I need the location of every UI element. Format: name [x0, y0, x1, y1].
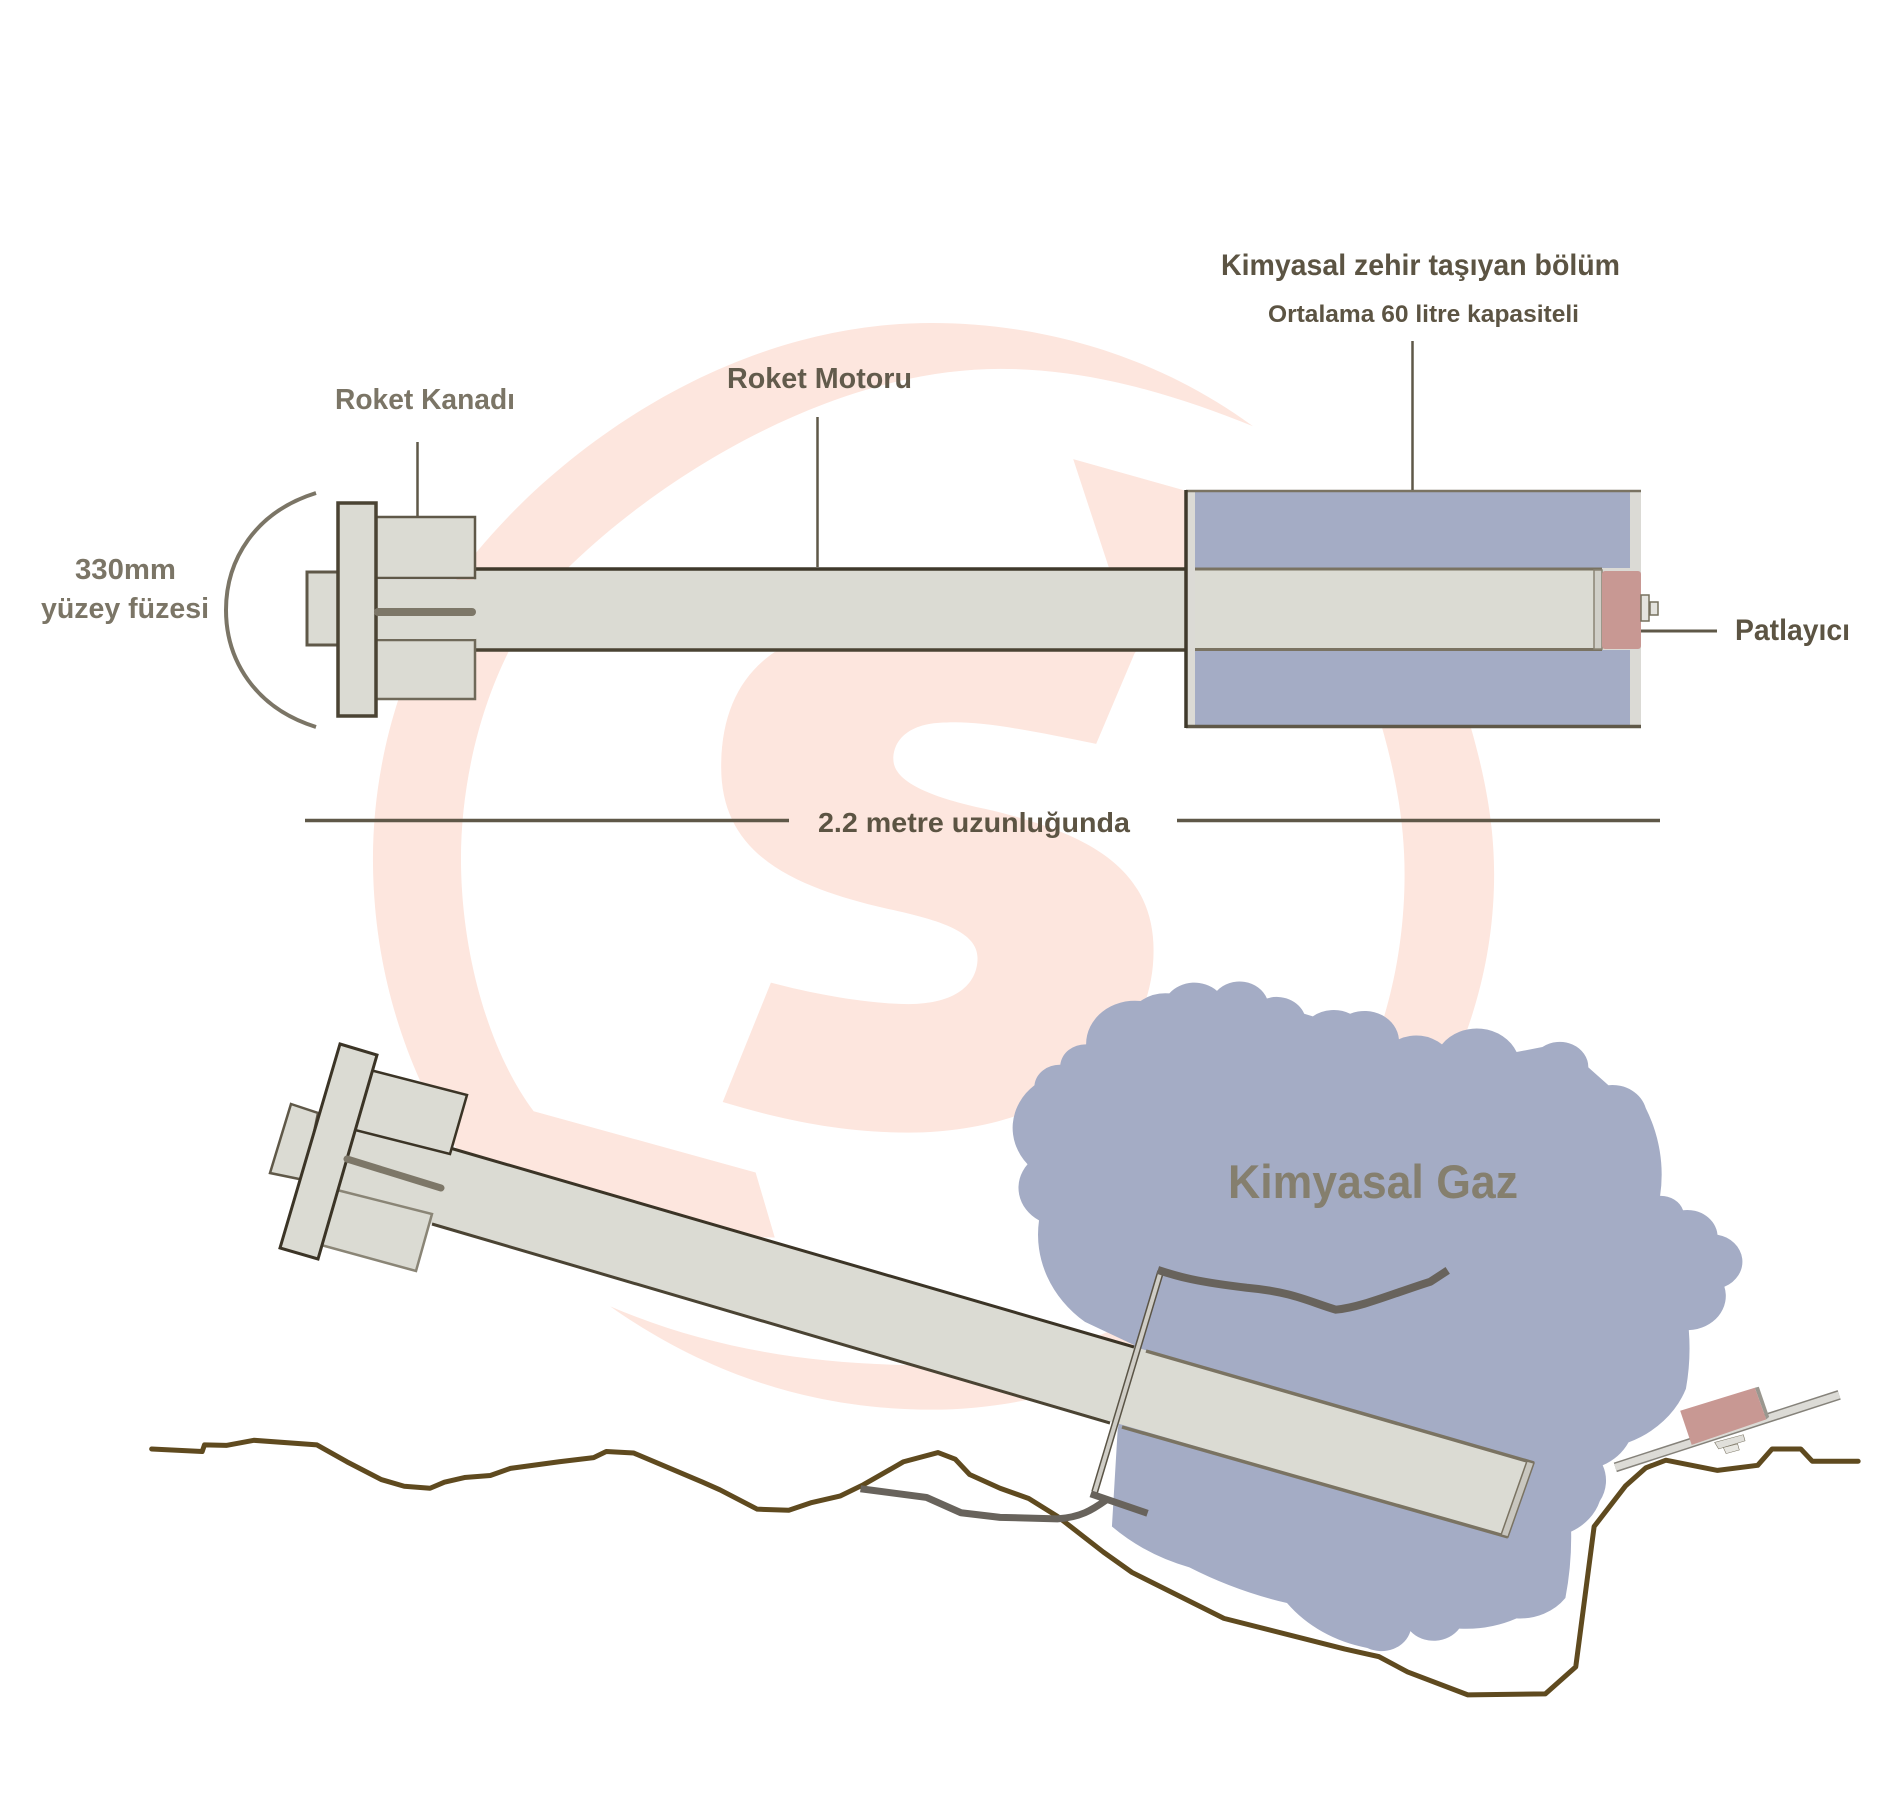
fuse [1641, 595, 1649, 621]
explosive [1602, 571, 1641, 649]
label: Kimyasal zehir taşıyan bölüm [1221, 249, 1620, 490]
watermark logo [373, 323, 1494, 1410]
tail stub [307, 572, 338, 645]
lower wire [861, 1489, 1106, 1519]
compartment bottom edge [1186, 725, 1641, 728]
rod [1095, 1271, 1161, 1492]
lower wire stub [1091, 1494, 1148, 1513]
fuse tip [1650, 602, 1658, 615]
lower chemical chamber [1195, 650, 1630, 725]
upper fin [376, 517, 475, 578]
label: 330mm yüzey füzesi: 330mm [75, 554, 176, 586]
upper fin [355, 1070, 467, 1154]
tube bottom edge [1195, 648, 1602, 651]
fin slot [378, 608, 472, 616]
upper wire [1158, 1270, 1448, 1310]
upper chemical chamber [1195, 492, 1630, 568]
body bottom edge inside gas [1122, 1427, 1508, 1537]
tube end ring [1594, 570, 1602, 649]
label: Kimyasal zehir taşıyan bölüm: Ortalama 60 litre kapasiteli [1268, 301, 1579, 328]
label: Roket Motoru: Roket Motoru [727, 363, 912, 395]
detached explosive [1680, 1388, 1766, 1445]
tube top edge [1195, 568, 1602, 570]
fin slot [347, 1159, 441, 1188]
detached explosive shadow [1755, 1387, 1769, 1419]
chemical compartment [1186, 490, 1658, 728]
lower fin [321, 1190, 432, 1271]
chemical gas cloud [1013, 981, 1742, 1651]
tail plate [280, 1044, 377, 1259]
lower fin [376, 640, 475, 699]
label: Kimyasal Gaz: Kimyasal Gaz [1228, 1155, 1518, 1208]
rocket motor body [474, 569, 1186, 650]
compartment top edge [1186, 490, 1641, 492]
small fuse section [1715, 1435, 1745, 1454]
tilted rocket [270, 1044, 1534, 1537]
label: 330mm yüzey füzesi [41, 493, 316, 727]
body bottom edge dark [432, 1224, 1110, 1423]
tail stub [270, 1104, 318, 1180]
label: 330mm yüzey füzesi: yüzey füzesi [41, 593, 209, 625]
dimension: 2.2 metre uzunluğunda: 2.2 metre uzunluğunda [818, 807, 1130, 838]
rocket body [337, 1130, 1534, 1537]
ground line [152, 1440, 1858, 1695]
body end cap [1501, 1461, 1534, 1537]
tail inner section [376, 580, 476, 639]
body bottom edge [474, 648, 1186, 652]
label: Kimyasal zehir taşıyan bölüm: Kimyasal zehir taşıyan bölüm [1221, 249, 1620, 282]
body top edge inside gas [1146, 1351, 1534, 1463]
inner tube [1195, 570, 1594, 649]
tail plate [338, 503, 376, 716]
body top edge dark [450, 1148, 1134, 1347]
detached nose rod [1615, 1395, 1839, 1467]
wires and rod [861, 1270, 1839, 1519]
compartment left edge [1184, 490, 1188, 728]
label: Patlayıcı: Patlayıcı [1735, 614, 1850, 647]
label: Roket Kanadı: Roket Kanadı [335, 384, 515, 416]
body top edge [474, 567, 1186, 571]
top rocket diagram [307, 490, 1658, 728]
